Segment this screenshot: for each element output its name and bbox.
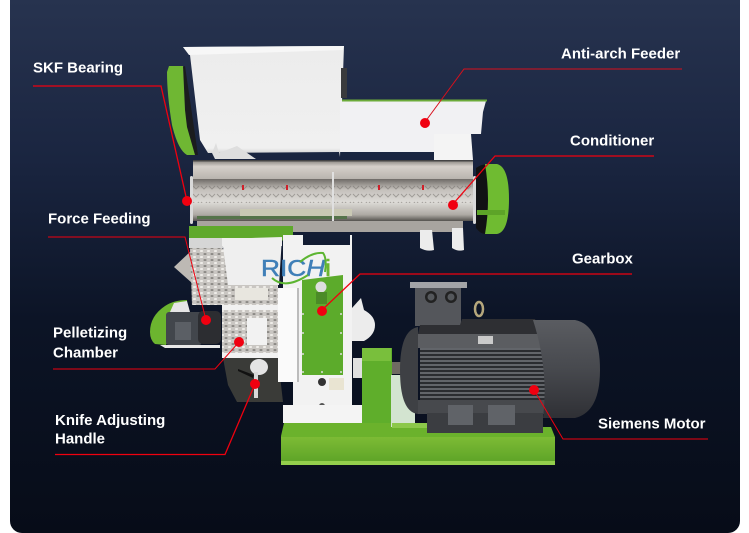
callout: Pelletizing Chamber: Pelletizing: [53, 324, 127, 342]
callout: Pelletizing Chamber: Chamber: [53, 344, 118, 362]
machine: pellet mill: [150, 46, 600, 465]
pelletizing chamber: [174, 226, 293, 402]
gearbox: [222, 235, 402, 425]
anti-arch feeder hopper: [167, 46, 487, 160]
callout: Gearbox: [317, 250, 634, 316]
siemens motor: [400, 282, 600, 433]
callout: Force Feeding: [48, 210, 211, 325]
callout: Pelletizing Chamber: [53, 324, 244, 369]
callout: Anti-arch Feeder: Anti-arch Feeder: [561, 46, 680, 62]
callout: Anti-arch Feeder: [420, 46, 682, 128]
callout: Force Feeding: Force Feeding: [48, 210, 151, 228]
callout: SKF Bearing: SKF Bearing: [33, 60, 123, 76]
callout: Siemens Motor: [529, 385, 708, 439]
callout: Gearbox: Gearbox: [572, 250, 634, 268]
callout: Knife Adjusting Handle: Knife Adjusting: [55, 412, 165, 429]
callout: SKF Bearing: [33, 60, 192, 206]
callout: Siemens Motor: Siemens Motor: [598, 416, 706, 432]
small drive motor: [150, 300, 221, 348]
callout: Conditioner: [448, 132, 654, 210]
base frame: [281, 375, 555, 465]
callout: Knife Adjusting Handle: Handle: [55, 430, 105, 448]
conditioner drum: [190, 160, 509, 251]
RICHi logo: RICHi: [261, 255, 331, 281]
callout: Knife Adjusting Handle: [55, 379, 260, 454]
callout: Conditioner: Conditioner: [570, 132, 654, 150]
